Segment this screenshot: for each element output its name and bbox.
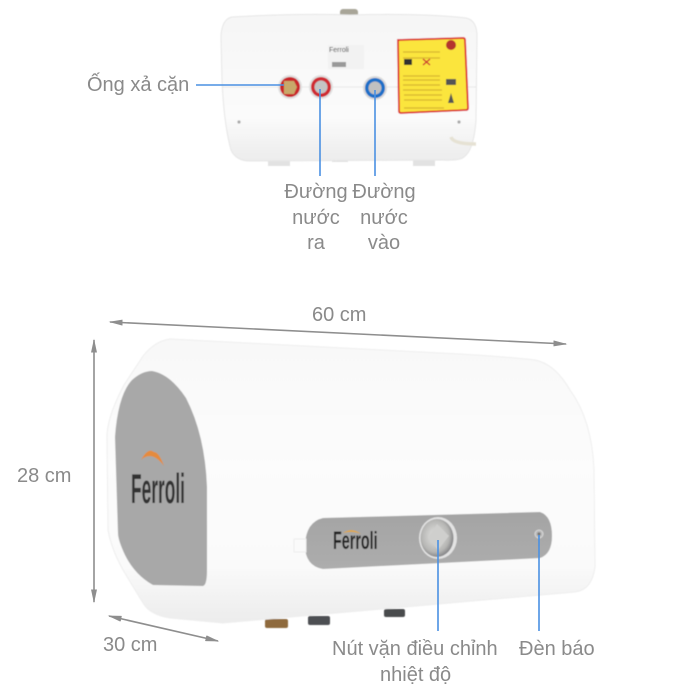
callout: thermostat knob <box>332 540 498 686</box>
bottom pipes <box>265 609 405 628</box>
brand label: Ferroli <box>329 47 349 54</box>
hot outlet fitting <box>309 75 333 99</box>
dimension: height 28 cm: 28 cm <box>17 465 71 487</box>
callout: indicator light: Đèn báo <box>519 638 595 660</box>
callout: thermostat knob: nhiệt độ <box>380 664 451 686</box>
warning sticker <box>398 38 468 113</box>
panel logo: Ferroli <box>333 528 378 555</box>
side bracket <box>294 539 306 552</box>
dimension: depth 30 cm: 30 cm <box>103 634 157 656</box>
callout: water outlet: ra <box>307 232 326 254</box>
top fitting <box>340 9 358 18</box>
callout: water inlet: vào <box>368 232 400 254</box>
side logo: Ferroli <box>131 465 185 512</box>
dimension: width 60 cm <box>110 304 566 344</box>
callout: indicator light <box>519 535 595 660</box>
control panel <box>305 512 552 569</box>
callout: water inlet: Đường <box>352 181 416 203</box>
dimension: width 60 cm: 60 cm <box>312 304 366 326</box>
side grey panel <box>115 371 207 586</box>
feet <box>268 158 435 166</box>
callout: water inlet <box>352 90 416 254</box>
power cord <box>451 137 476 144</box>
brand label <box>328 45 364 69</box>
dimension: depth 30 cm <box>103 616 218 656</box>
screws <box>237 120 461 124</box>
callout: water outlet <box>284 89 348 254</box>
callout: water inlet: nước <box>360 207 408 229</box>
front view: water heater <box>107 339 595 628</box>
drain fitting <box>278 75 302 99</box>
callout: drain valve: Ống xả cặn <box>87 72 189 96</box>
thermostat knob <box>419 517 457 559</box>
tank body <box>107 339 595 623</box>
callout: water outlet: nước <box>292 207 340 229</box>
top view: rear of water heater <box>221 9 477 166</box>
callout: water outlet: Đường <box>284 181 348 203</box>
indicator light <box>535 530 543 538</box>
callout: thermostat knob: Nút vặn điều chỉnh <box>332 638 498 660</box>
rear body <box>221 14 477 161</box>
cold inlet fitting <box>363 76 387 100</box>
